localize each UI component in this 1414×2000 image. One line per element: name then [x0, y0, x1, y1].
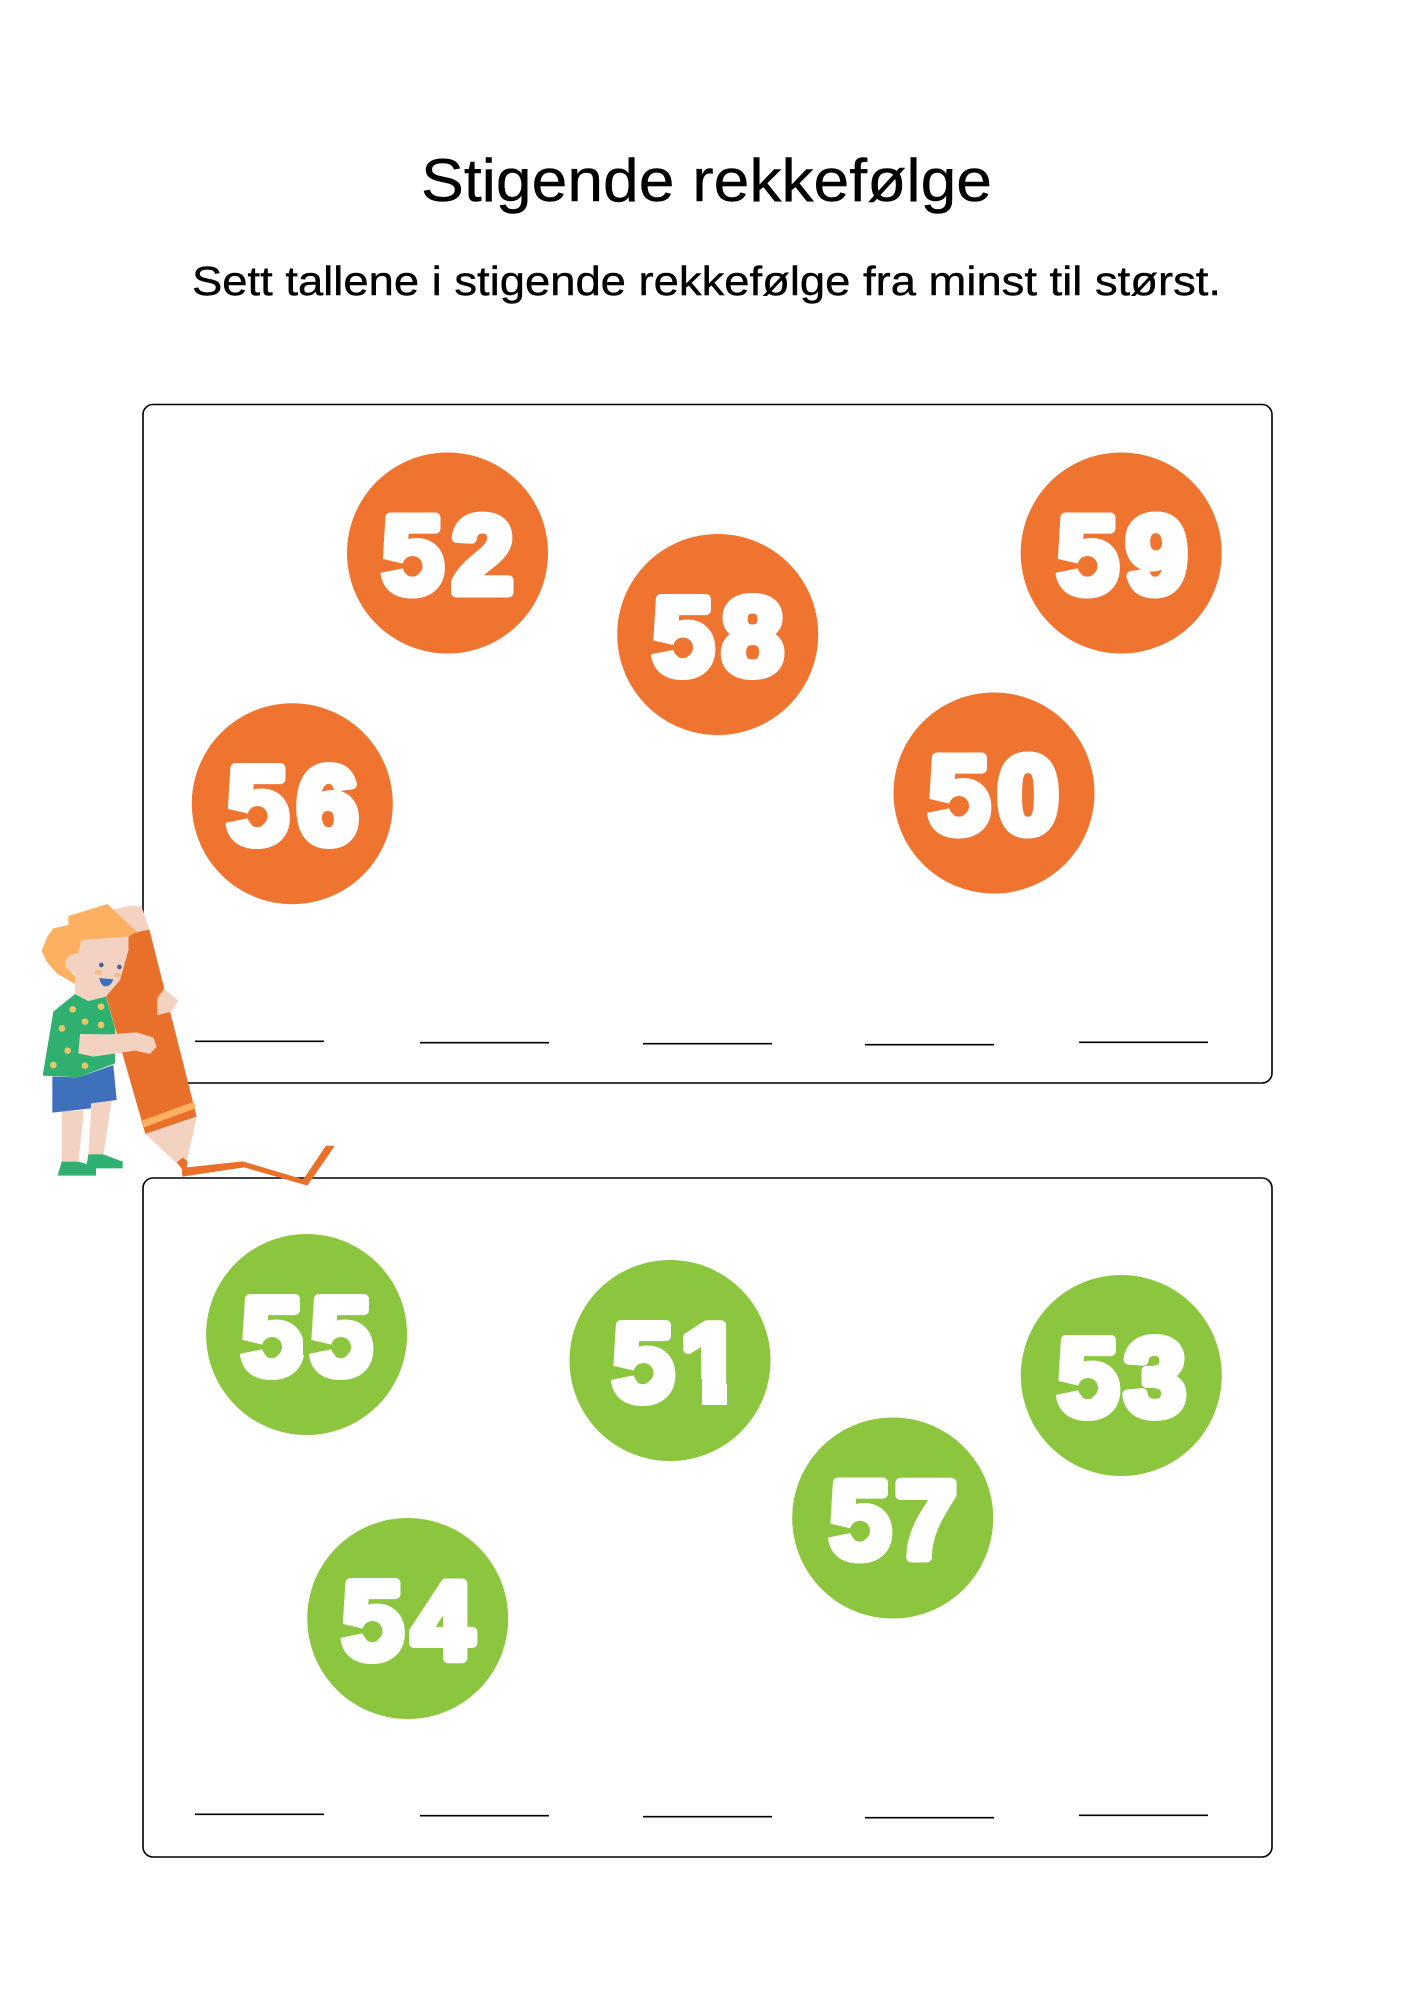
circle 56	[192, 703, 393, 904]
circle 53	[1021, 1275, 1222, 1476]
circle 59	[1021, 452, 1222, 654]
circle 55: 55	[242, 1276, 371, 1398]
circle 51	[570, 1260, 770, 1461]
panel: green numbers	[143, 1178, 1272, 1857]
circle 53: 53	[1058, 1317, 1185, 1439]
circle 52: 52	[382, 494, 513, 616]
subtitle: Sett tallene i stigende rekkefølge fra minst til størst.	[192, 258, 1221, 304]
circle 50: 50	[929, 734, 1058, 856]
circle 50	[894, 692, 1094, 894]
circle 58: 58	[653, 576, 783, 698]
circle 54: 54	[342, 1560, 473, 1682]
circle 57	[792, 1418, 993, 1618]
answer lines	[195, 1041, 1208, 1045]
illustration: child holding pencil	[42, 904, 335, 1186]
circle 59: 59	[1057, 494, 1187, 616]
answer lines	[195, 1814, 1208, 1818]
circle 55	[206, 1234, 407, 1435]
circle 54	[307, 1518, 508, 1719]
circle 52	[347, 452, 548, 654]
panel: orange numbers	[143, 404, 1272, 1083]
circle 58	[617, 534, 818, 735]
circle 57: 57	[830, 1460, 956, 1582]
title: Stigende rekkefølge	[421, 147, 992, 214]
circle 51: 51	[613, 1302, 741, 1424]
circle 56: 56	[227, 745, 358, 867]
